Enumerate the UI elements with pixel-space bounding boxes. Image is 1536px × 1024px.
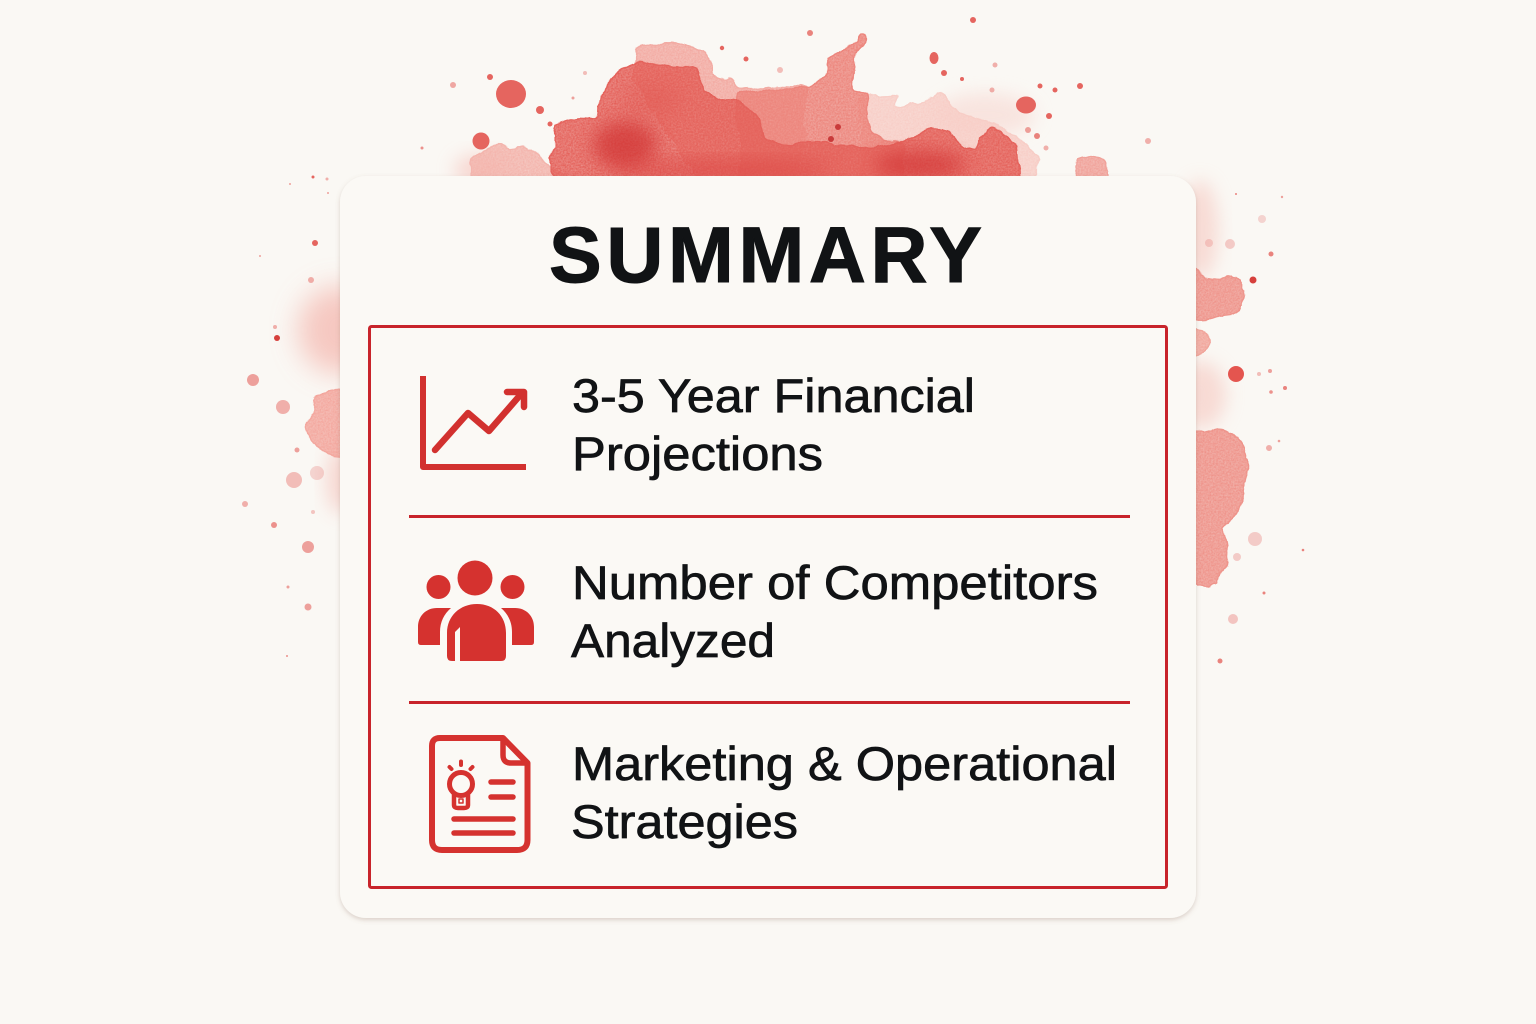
text: financial projections: Projections [572, 427, 823, 480]
panel: summary card [340, 176, 1196, 918]
divider 1 [409, 515, 1130, 518]
text: strategies: Marketing & Operational [572, 737, 1117, 790]
divider 2 [409, 701, 1130, 704]
text: competitors: Analyzed [571, 614, 775, 667]
item: strategies [432, 737, 1117, 850]
text: competitors [571, 556, 1098, 667]
icon: group of people [418, 560, 534, 661]
text: financial projections: 3-5 Year Financial [572, 369, 975, 422]
title: SUMMARY [549, 210, 982, 299]
watercolor splash: top [454, 30, 1108, 190]
text: strategies [571, 737, 1117, 848]
item: competitors [418, 556, 1098, 667]
watercolor splash: left [298, 286, 382, 514]
panel: red frame with items [370, 326, 1166, 888]
text: strategies: Strategies [571, 795, 798, 848]
paint droplets [242, 17, 1304, 664]
icon: line chart with arrow [423, 376, 526, 467]
item: financial projections [423, 369, 975, 480]
text: competitors: Number of Competitors [572, 556, 1098, 609]
watercolor splash: right [1174, 180, 1251, 588]
text: financial projections [572, 369, 975, 480]
icon: document with light bulb [432, 738, 528, 850]
